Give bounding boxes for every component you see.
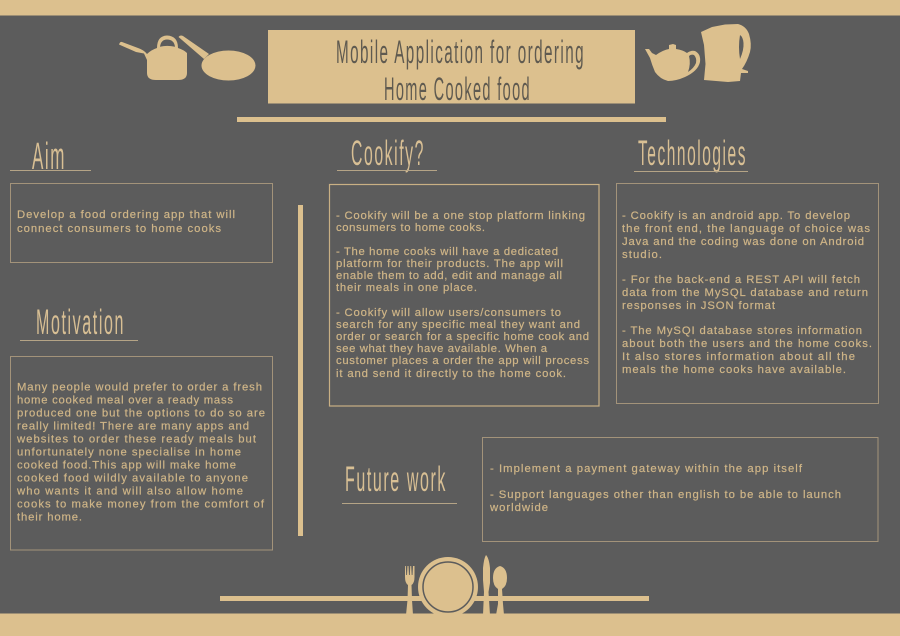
technologies text: the front end, the language of choice was: [622, 223, 870, 235]
future work text: worldwide: [489, 502, 548, 514]
panel: future work: [482, 438, 878, 542]
cookify text: see what they have available. When a: [336, 343, 548, 355]
heading: Technologies: [634, 134, 748, 173]
motivation text: their home.: [17, 512, 82, 524]
motivation text: home cooked meal over a ready mass: [17, 394, 233, 406]
cookify text: order or search for a specific home cook and: [336, 331, 589, 343]
cookify text: enable them to add, edit and manage all: [336, 270, 562, 282]
technologies text: about both the users and the home cooks.: [622, 338, 872, 350]
title box: Mobile Application for ordering: [336, 34, 585, 70]
technologies text: studio.: [622, 249, 662, 261]
icon: place setting: [405, 555, 507, 617]
cookify text: their meals in one place.: [336, 282, 477, 294]
heading: Motivation: Motivation: [36, 303, 125, 342]
technologies text: Java and the coding was done on Android: [622, 236, 864, 248]
technologies text: - Cookify is an android app. To develop: [622, 210, 850, 222]
cookify text: search for any specific meal they want and: [336, 319, 580, 331]
technologies text: data from the MySQL database and return: [622, 287, 868, 299]
heading: Motivation: [20, 303, 138, 342]
technologies text: - For the back-end a REST API will fetch: [622, 274, 860, 286]
footer rule: [220, 596, 649, 601]
heading: Future work: Future work: [345, 460, 447, 499]
heading: Cookify?: [337, 134, 437, 173]
cookify text: - Cookify will allow users/consumers to: [336, 307, 561, 319]
title: Home Cooked food: [384, 71, 531, 107]
motivation text: produced one but the options to do so are: [17, 408, 265, 420]
header rule: [237, 117, 666, 122]
technologies text: - The MySQI database stores information: [622, 325, 862, 337]
cookify text: [336, 210, 589, 380]
motivation text: websites to order these ready meals but: [16, 434, 257, 446]
aim text: [17, 209, 235, 235]
panel: cookify: [330, 184, 599, 406]
heading: Aim: Aim: [32, 136, 66, 178]
top band: [0, 0, 900, 16]
icon: fork: [405, 566, 414, 615]
vertical divider: [298, 205, 303, 536]
aim text: connect consumers to home cooks: [17, 223, 221, 235]
cookify text: consumers to home cooks.: [336, 222, 485, 234]
icon: teapot: [645, 44, 700, 81]
motivation text: Many people would prefer to order a fresh: [17, 382, 262, 394]
technologies text: It also stores information about all the: [622, 351, 855, 363]
cookify text: it and send it directly to the home cook.: [336, 368, 566, 380]
title: [336, 34, 585, 107]
heading: Aim: [10, 136, 91, 178]
cookify text: - Cookify will be a one stop platform linking: [336, 210, 585, 222]
icon: plate: [418, 557, 478, 617]
cookify text: customer places a order the app will process: [336, 355, 589, 367]
future work text: - Support languages other than english to be able to launch: [490, 489, 841, 501]
technologies text: responses in JSON format: [622, 300, 776, 312]
icon: saucepan: [119, 36, 187, 80]
panel: technologies: [616, 184, 878, 404]
motivation text: unfortunately none specialise in home: [17, 446, 241, 458]
motivation text: who wants it and will also allow home: [16, 486, 243, 498]
panel: motivation: [10, 356, 272, 550]
icon: spoon: [493, 566, 507, 615]
bottom band: [0, 614, 900, 636]
cookify text: - The home cooks will have a dedicated: [336, 246, 558, 258]
cookify text: platform for their products. The app will: [336, 258, 563, 270]
aim text: Develop a food ordering app that will: [17, 209, 235, 221]
heading: Cookify?: Cookify?: [351, 134, 425, 173]
motivation text: [16, 382, 265, 524]
motivation text: cooks to make money from the comfort of: [17, 498, 265, 510]
motivation text: really limited! There are many apps and: [17, 420, 249, 432]
motivation text: cooked food wildly available to anyone: [17, 472, 248, 484]
title box: [268, 30, 635, 107]
technologies text: [622, 210, 872, 376]
panel: aim: [10, 184, 272, 262]
future work text: - Implement a payment gateway within the app itself: [490, 463, 803, 475]
text: Technologies: [638, 134, 747, 173]
technologies text: meals the home cooks have available.: [622, 364, 846, 376]
icon: kettle: [701, 24, 751, 82]
icon: knife: [483, 555, 490, 615]
heading: Future work: [342, 460, 457, 504]
icon: frying pan: [178, 35, 256, 80]
motivation text: cooked food.This app will make home: [17, 460, 236, 472]
future work text: [489, 463, 841, 514]
